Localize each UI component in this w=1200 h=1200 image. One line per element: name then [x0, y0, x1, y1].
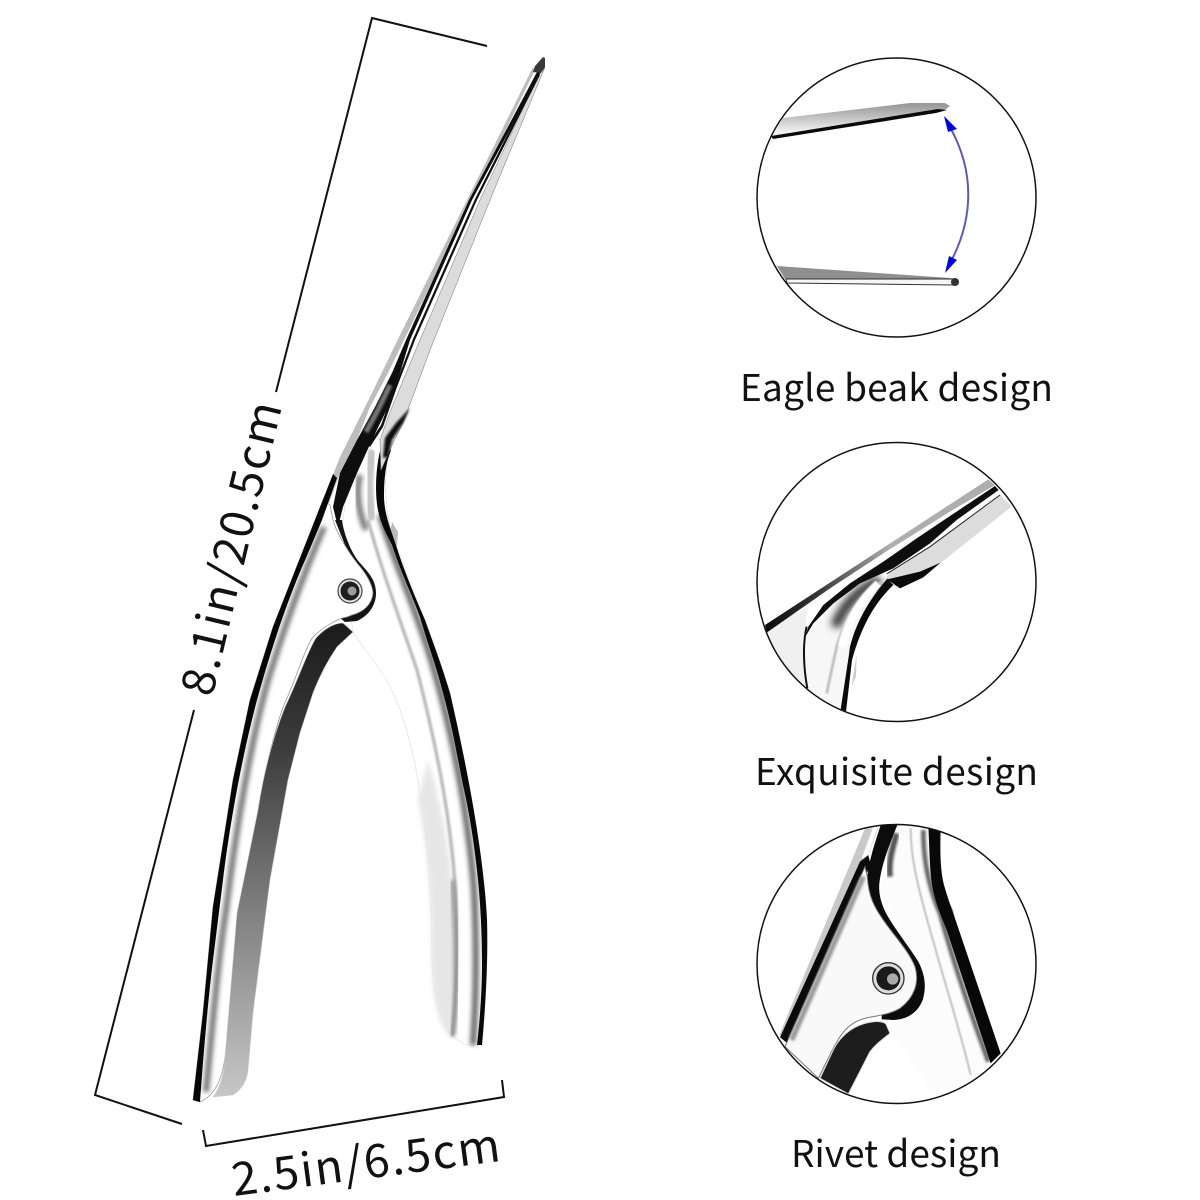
outer white sliver [862, 828, 877, 858]
thin dark line below channel [887, 495, 1000, 574]
left plate edge [804, 627, 807, 688]
right arm faint crease [911, 828, 971, 1075]
right arm body [880, 825, 1000, 1092]
main product: shrimp peeler tool [193, 57, 545, 1102]
upper beak outer body [323, 57, 543, 510]
right arm grey crease [368, 520, 457, 1036]
upper jaw tip [773, 103, 950, 136]
right arm grey ridge [369, 450, 373, 520]
upper grey strip fading to black [765, 479, 995, 633]
dark channel [805, 486, 999, 637]
lower jaw white stripe [786, 279, 953, 285]
lower beak grey face [885, 495, 1012, 587]
white rivet plate [785, 867, 917, 1078]
plate soft shading [792, 877, 863, 1040]
soft shadow of bend [835, 580, 880, 627]
infographic canvas [94, 16, 1050, 1196]
lower jaw tip [777, 266, 955, 279]
small rear lug [390, 522, 398, 546]
circle outline [757, 824, 1036, 1104]
height dimension bracket [95, 18, 487, 1124]
rivet ring [873, 963, 904, 994]
caption: exquisite design: Exquisite design [755, 742, 1038, 796]
rear lug [852, 653, 857, 687]
left arm black edge [193, 474, 337, 1102]
beak detail contents [771, 103, 968, 286]
lower arrow head [945, 256, 957, 273]
rivet pin [887, 973, 898, 985]
right arm body [340, 430, 487, 1045]
lower jaw point [951, 278, 959, 286]
exquisite detail contents [760, 479, 1012, 712]
detail circle: rivet design [757, 824, 1036, 1104]
rivet plate dark rim [335, 520, 376, 622]
width dimension bracket [203, 1080, 504, 1146]
left plate [768, 607, 808, 687]
caption: eagle beak design: Eagle beak design [740, 358, 1053, 412]
right arm pivot body [803, 573, 897, 712]
right arm black edge [928, 827, 1001, 1063]
dark channel and rim [867, 825, 925, 1020]
left arm soft shading [206, 527, 324, 1092]
beak thin dark stripe [368, 74, 540, 447]
rivet centre pin [348, 586, 356, 596]
grey ridge [827, 582, 882, 693]
height dimension label: 8.1in/20.5cm [161, 394, 296, 701]
right arm soft shade [923, 830, 988, 1062]
white bend highlight [842, 583, 878, 647]
main dark channel of the jaw [333, 72, 541, 527]
right arm shade beside edge [380, 515, 476, 1045]
right arm lower inner tone [418, 760, 456, 1038]
lower dark flange [820, 1021, 890, 1094]
lower beak grey face [380, 67, 545, 470]
beak tip [533, 57, 545, 73]
outer black stripe [780, 855, 871, 1043]
rivet outer ring [338, 579, 362, 603]
detail circle: eagle beak [757, 58, 1036, 337]
right arm black edge [376, 447, 487, 1045]
rivet socket [876, 966, 900, 990]
circle outline [757, 442, 1036, 722]
right arm soft shadow at top [890, 833, 897, 877]
upper arrow head [944, 116, 957, 132]
left arm dark inner flange [213, 623, 353, 1097]
circle outline [757, 58, 1036, 337]
right arm lower grey band [452, 880, 456, 1036]
outer grey bar [779, 828, 878, 1040]
detail circle: exquisite design [757, 442, 1036, 722]
left arm white body [193, 500, 373, 1102]
lower beak black contour [383, 408, 410, 458]
black lower contour [887, 563, 941, 588]
right arm inner soft lobe shading [358, 475, 366, 530]
channel soft grey inner [366, 385, 390, 432]
upper jaw black edge [771, 109, 947, 139]
rivet dark socket [340, 582, 360, 600]
upper beak grey outer strip [323, 67, 535, 503]
rivet [338, 579, 362, 603]
caption: rivet design: Rivet design [791, 1124, 1001, 1178]
black curved edge [841, 579, 893, 712]
small rear lug [950, 904, 955, 918]
rivet detail contents [779, 825, 1001, 1094]
double arrow arc [950, 130, 970, 258]
